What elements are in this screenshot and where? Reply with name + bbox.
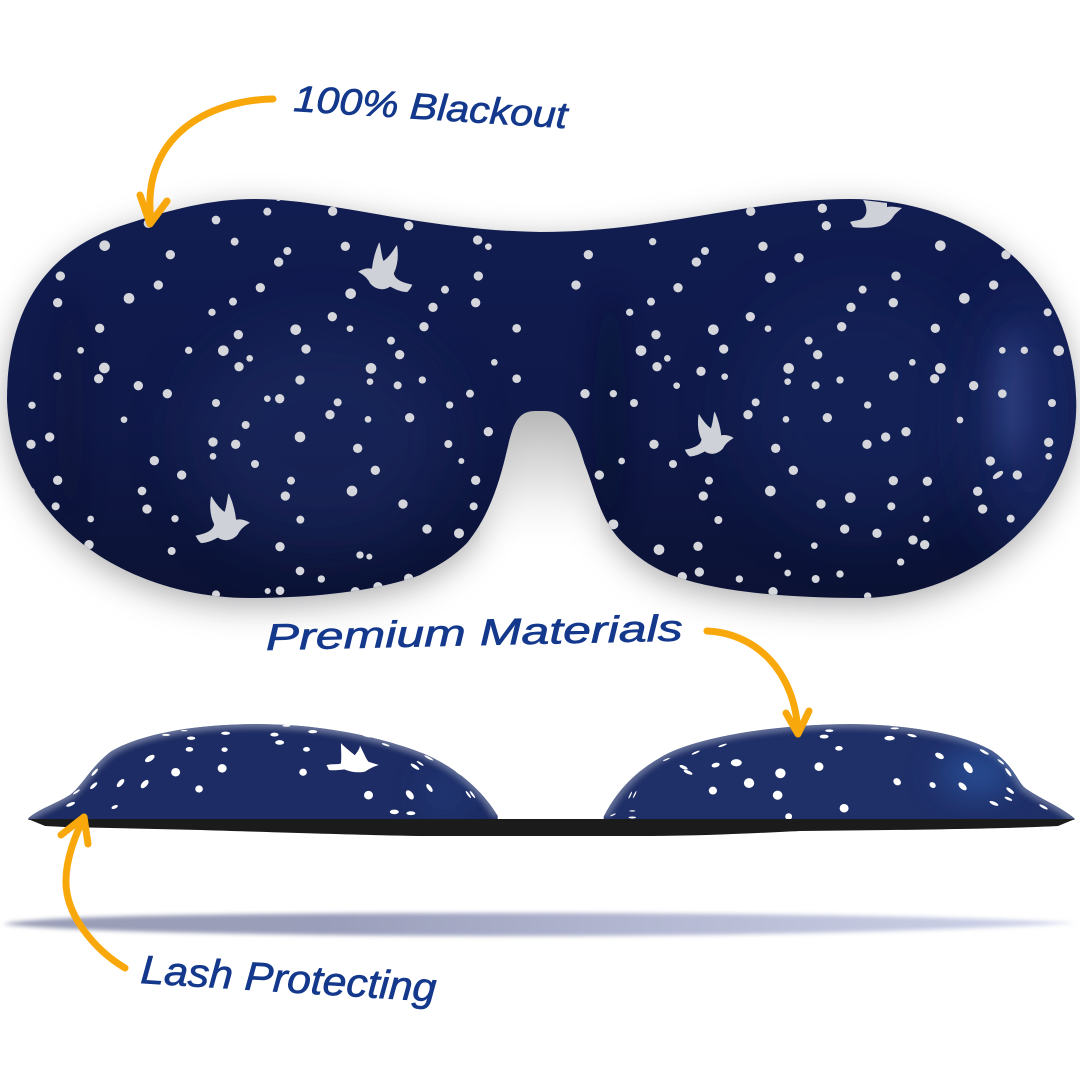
left lobe dots <box>66 725 476 815</box>
mask drop shadow <box>7 207 1076 606</box>
arrow: 100% blackout <box>140 99 273 224</box>
label: Lash Protecting: Lash Protecting <box>139 948 438 1011</box>
ground shadow <box>3 913 1075 936</box>
side bird <box>326 743 379 772</box>
left lobe <box>28 724 498 820</box>
snow dots left half <box>26 196 1064 600</box>
front view eye mask <box>7 196 1080 600</box>
right lobe dots <box>610 727 1048 820</box>
black base band <box>28 819 1075 836</box>
label: 100% Blackout: 100% Blackout <box>292 78 570 136</box>
nose notch shadow <box>480 405 600 555</box>
snow dots right half <box>571 204 1064 600</box>
side view eye mask <box>28 724 1075 836</box>
arrow: premium materials <box>707 631 809 734</box>
arrow: lash protecting <box>61 817 125 968</box>
right lobe <box>604 724 1075 820</box>
birds <box>196 200 902 543</box>
label: Premium Materials: Premium Materials <box>265 608 683 658</box>
mask shading <box>199 292 1076 554</box>
